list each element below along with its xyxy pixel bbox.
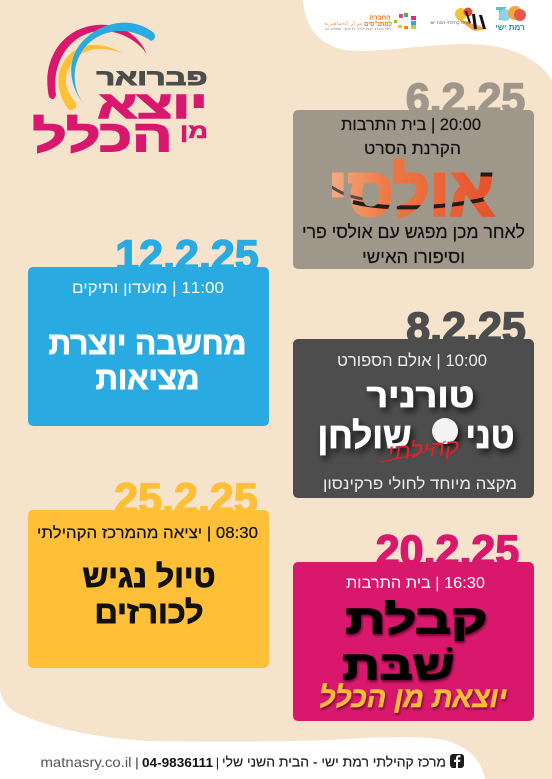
subtitle: הקרנת הסרט <box>364 139 461 158</box>
time and place: 16:30 | בית התרבות <box>346 575 485 592</box>
panel <box>293 562 534 721</box>
logo word min: מן <box>180 120 208 143</box>
date: 6.2.25 <box>406 75 525 123</box>
logo: Matnasim company: مركز الجماهيرية <box>324 20 362 27</box>
footer contact line: | <box>135 755 139 770</box>
date: 12.2.25 <box>115 232 259 280</box>
logo month: פברואר <box>96 65 208 90</box>
time and place: 11:00 | מועדון ותיקים <box>72 280 224 297</box>
event 25.2.25: accessible hike <box>28 475 269 668</box>
time and place: 10:00 | אולם הספורט <box>337 351 487 370</box>
event 8.2.25: table tennis tournament <box>293 304 534 498</box>
logo: February out of the ordinary <box>32 23 208 161</box>
event 12.2.25: creative thinking <box>28 232 269 426</box>
title line 2: שׁבּת <box>342 644 454 688</box>
logo: Matnasim company: תרבות קהילה חינוך ספורט <box>325 27 392 31</box>
logo word haklal: הכלל <box>32 112 172 161</box>
title line 1: מחשבה יוצרת <box>48 326 246 361</box>
logo word yotze: יוצא <box>98 85 208 127</box>
panel <box>28 267 269 426</box>
title line 2: מציאות <box>96 361 200 396</box>
logo: Matnasim company: החברה <box>370 14 391 22</box>
title <box>319 598 507 714</box>
icon: ping pong ball <box>432 418 458 444</box>
logo: Matnasim company <box>324 13 416 31</box>
date: 8.2.25 <box>406 304 526 352</box>
title line 1: קבלת <box>346 598 488 642</box>
note: מקצה מיוחד לחולי פרקינסון <box>323 475 517 493</box>
film title: Olsi in basketball texture: אולסי <box>328 154 494 230</box>
panel <box>293 339 534 498</box>
logo arcs <box>47 23 155 110</box>
organization name: מרכז קהילתי רמת ישי - הבית השני שלי <box>222 754 446 770</box>
logo: community runners: מרכז קהילתי רמת ישי <box>430 20 470 25</box>
date: 20.2.25 <box>376 527 519 575</box>
footer contact line <box>40 754 464 770</box>
icon: facebook <box>450 754 464 768</box>
logo: Matnasim company: למתנ"סים <box>364 20 392 28</box>
script line: יוצאת מן הכלל <box>319 682 507 714</box>
title line 1: טורניר <box>366 377 474 414</box>
description line 1: לאחר מכן מפגש עם אולסי פרי <box>302 222 525 242</box>
website: matnasry.co.il <box>40 754 132 770</box>
title line 2: לכורזים <box>94 595 204 630</box>
time and place: 20:00 | בית התרבות <box>341 115 481 134</box>
event 20.2.25: kabbalat shabbat <box>293 527 534 721</box>
title line 1: טיול נגיש <box>82 559 216 594</box>
logo: community runners <box>430 8 488 31</box>
footer contact line: | <box>216 755 219 770</box>
logo: Ramat Yishai: רמת ישי <box>495 23 525 32</box>
community script: קהילתי <box>386 434 460 465</box>
description line 2: וסיפורו האישי <box>362 247 465 267</box>
panel <box>293 110 534 269</box>
partner logos <box>324 6 526 32</box>
phone: 04-9836111 <box>142 755 213 770</box>
panel <box>28 510 269 668</box>
tournament title <box>318 377 514 456</box>
event 6.2.25: film screening <box>293 75 534 269</box>
title word tennis: טני <box>466 415 514 456</box>
time and place: 08:30 | יציאה מהמרכז הקהילתי <box>37 524 258 542</box>
title word table: שולחן <box>318 415 412 456</box>
date: 25.2.25 <box>114 475 258 523</box>
logo: Ramat Yishai <box>495 6 526 32</box>
